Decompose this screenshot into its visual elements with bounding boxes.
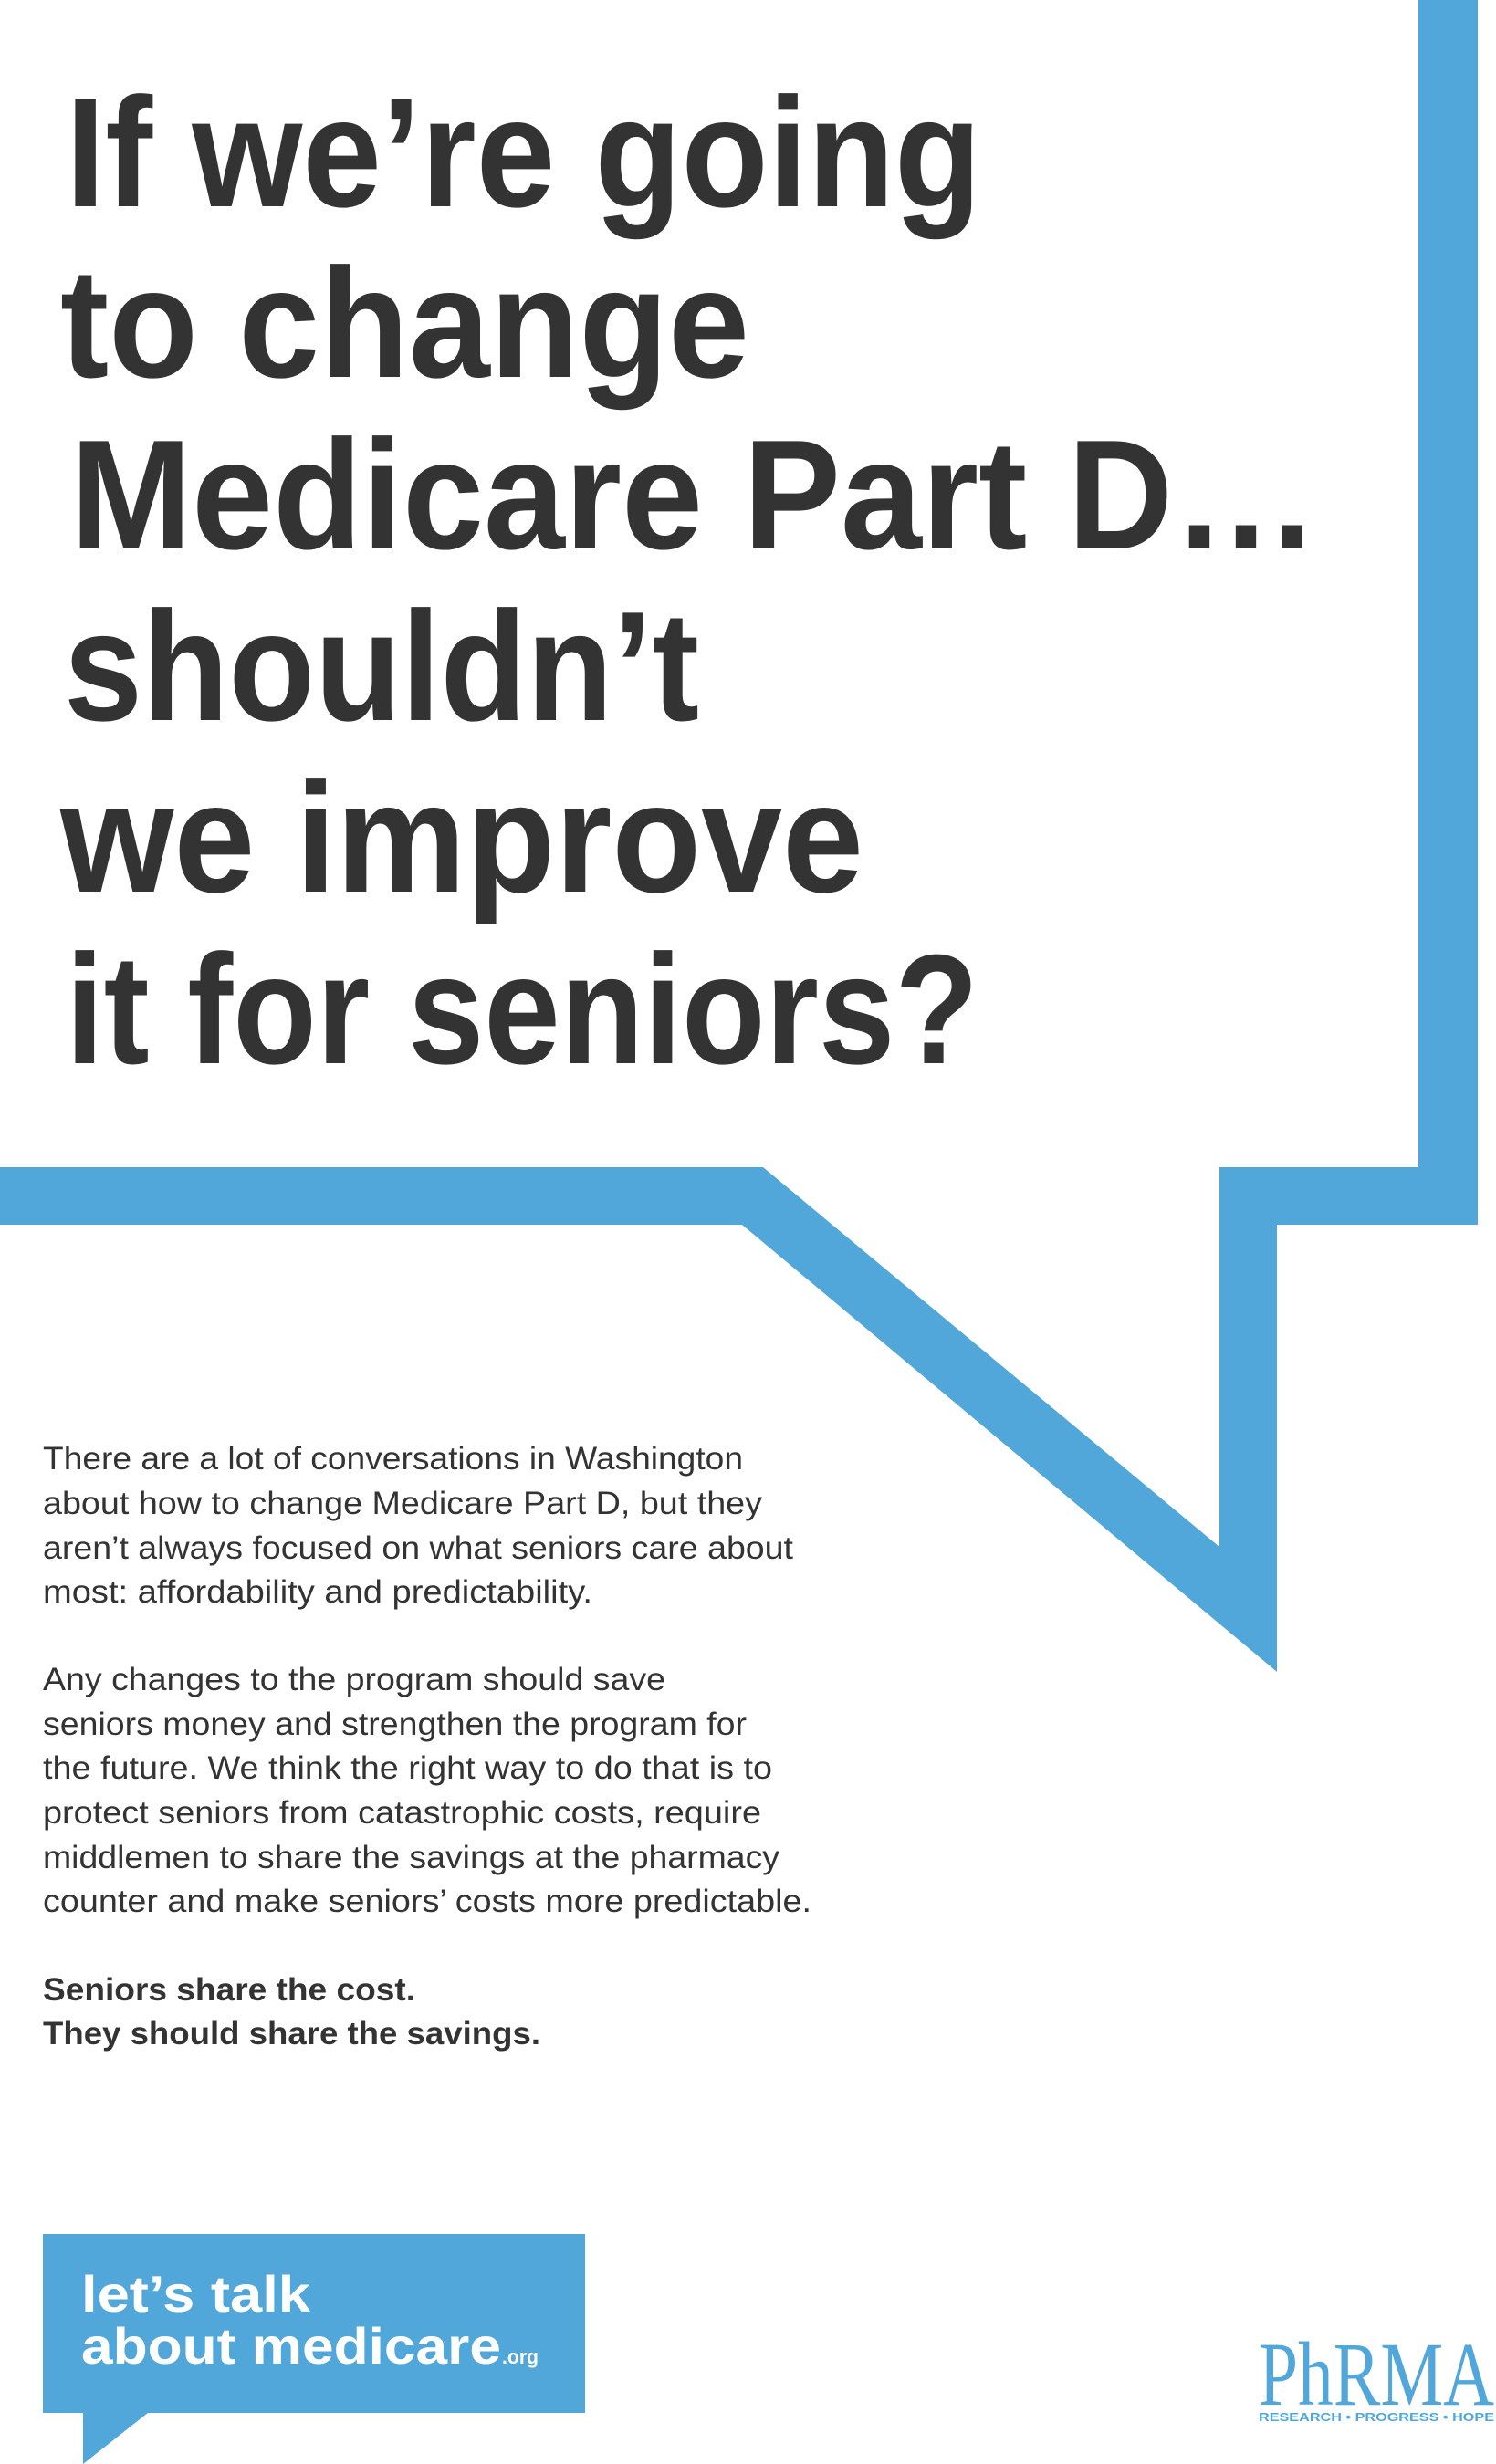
speech bubble outline	[0, 0, 1478, 1672]
logo: let's talk about medicare: let’s talk	[81, 2265, 311, 2323]
body text paragraph 1: There are a lot of conversations in Washington	[43, 1441, 743, 1477]
title: Medicare Part D…	[70, 408, 1319, 582]
body text paragraph 2: Any changes to the program should save	[43, 1662, 665, 1697]
bold tagline	[43, 1972, 540, 2052]
title: shouldn’t	[64, 579, 699, 754]
bold tagline: They should share the savings.	[43, 2016, 540, 2052]
title: to change	[60, 236, 749, 411]
body text paragraph 1: aren’t always focused on what seniors care about	[43, 1530, 793, 1566]
title: If we’re going	[66, 66, 981, 240]
logo: let's talk about medicare: .org	[502, 2345, 539, 2368]
body text paragraph 1: about how to change Medicare Part D, but they	[43, 1486, 763, 1521]
title: it for seniors?	[66, 923, 978, 1097]
logo: PhRMA: RESEARCH • PROGRESS • HOPE	[1259, 2410, 1494, 2424]
logo: let's talk about medicare	[43, 2234, 585, 2464]
body text paragraph 2: counter and make seniors’ costs more predictable.	[43, 1884, 811, 1919]
body text paragraph 1: most: affordability and predictability.	[43, 1574, 592, 1610]
body text paragraph 2: seniors money and strengthen the program for	[43, 1707, 747, 1742]
body text paragraph 2: protect seniors from catastrophic costs, require	[43, 1795, 761, 1831]
bold tagline: Seniors share the cost.	[43, 1972, 415, 2008]
title: we improve	[59, 751, 863, 925]
body text paragraph 1	[43, 1441, 793, 1610]
logo: let's talk about medicare: about medicare	[81, 2317, 501, 2375]
title	[59, 66, 1319, 1097]
body text paragraph 2	[43, 1662, 811, 1919]
body text paragraph 2: middlemen to share the savings at the pharmacy	[43, 1840, 780, 1875]
body text paragraph 2: the future. We think the right way to do that is to	[43, 1750, 772, 1786]
